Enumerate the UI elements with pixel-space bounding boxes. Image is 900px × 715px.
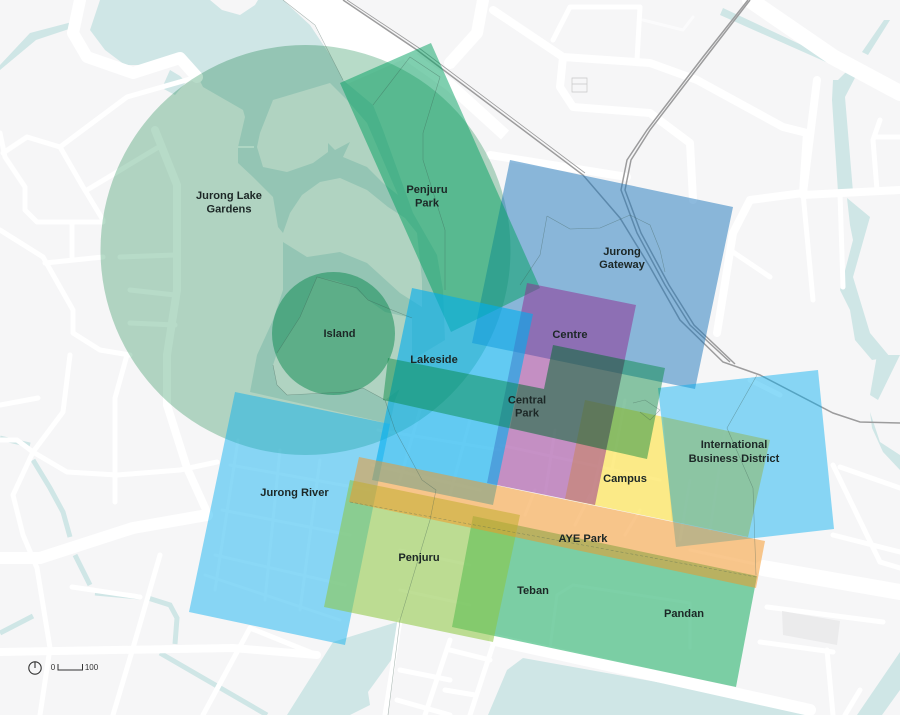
label: Jurong River: Jurong River: [260, 487, 329, 499]
area: Penjuru Park: [340, 43, 540, 332]
overlap: Central Park and Centre: [510, 345, 625, 450]
area: AYE Park: [349, 457, 765, 588]
label: Penjuru Park: Park: [415, 198, 440, 210]
railway lines: [343, 0, 900, 423]
label: Jurong Gateway: Gateway: [599, 259, 646, 271]
label: International Business District: International: [701, 439, 767, 451]
scale bar: [51, 663, 99, 672]
label: Island: Island: [323, 328, 356, 340]
area: Lakeside: [372, 288, 533, 505]
label: Teban: Teban: [517, 585, 549, 597]
area: Jurong Lake Gardens: [100, 45, 510, 455]
label: Penjuru: Penjuru: [398, 552, 440, 564]
label: Pandan: Pandan: [664, 608, 704, 620]
area: Central Park: [383, 345, 665, 459]
label: Lakeside: Lakeside: [410, 354, 458, 366]
label: Jurong Lake Gardens: Jurong Lake: [196, 190, 262, 202]
label: Jurong Lake Gardens: Gardens: [206, 204, 252, 216]
label: Centre: Centre: [552, 329, 588, 341]
label: International Business District: Business District: [689, 453, 780, 465]
boundary lines: [273, 0, 757, 715]
area: Jurong River: [189, 392, 390, 645]
label: Penjuru Park: Penjuru: [406, 184, 448, 196]
label: Jurong Gateway: Jurong: [603, 246, 641, 258]
area: Teban and Pandan: [452, 516, 757, 687]
icon: north arrow: [29, 662, 41, 674]
label: Campus: Campus: [603, 473, 647, 485]
overlap: Campus and International Business District: [663, 417, 770, 537]
area: Island: [272, 272, 395, 395]
area: International Business District: [658, 370, 834, 547]
label: AYE Park: AYE Park: [559, 533, 608, 545]
area: Penjuru: [324, 480, 520, 642]
area: Centre: [487, 283, 636, 505]
scale bar: 100: [85, 663, 99, 672]
label: Central Park: Park: [515, 408, 540, 420]
area: Jurong Gateway: [472, 160, 733, 389]
label: Central Park: Central: [508, 394, 546, 406]
area: Campus: [565, 400, 770, 537]
scale bar: 0: [51, 663, 56, 672]
